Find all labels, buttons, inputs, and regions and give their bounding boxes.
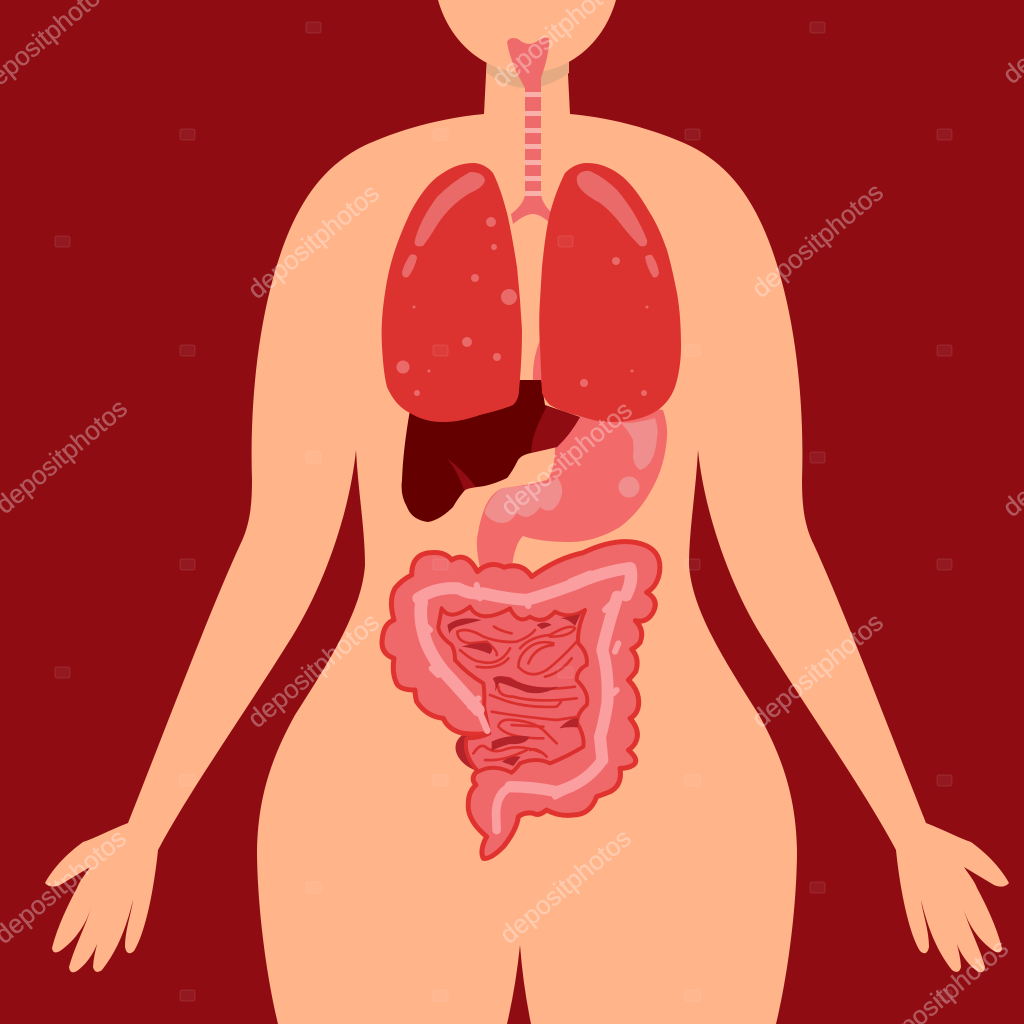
watermark: depositphotos text: depositphotos — [242, 607, 385, 734]
trachea — [507, 38, 553, 224]
neck shadow — [487, 58, 569, 88]
right lung — [539, 163, 681, 422]
left lung — [382, 163, 522, 422]
watermark: depositphotos text: depositphotos — [746, 607, 889, 734]
liver — [402, 380, 580, 522]
small intestine — [438, 607, 587, 773]
head — [434, 0, 620, 73]
watermark: depositphotos text: depositphotos — [746, 177, 889, 304]
stomach — [477, 340, 667, 578]
watermark: depositphotos text: depositphotos — [242, 178, 385, 305]
large intestine — [382, 542, 660, 859]
intestines — [382, 542, 660, 859]
colon lumen highlight — [418, 568, 631, 830]
watermark: depositphotos text: depositphotos — [495, 395, 638, 522]
dark shape behind bowel — [456, 733, 497, 772]
watermark: depositphotos text: depositphotos — [494, 823, 637, 950]
